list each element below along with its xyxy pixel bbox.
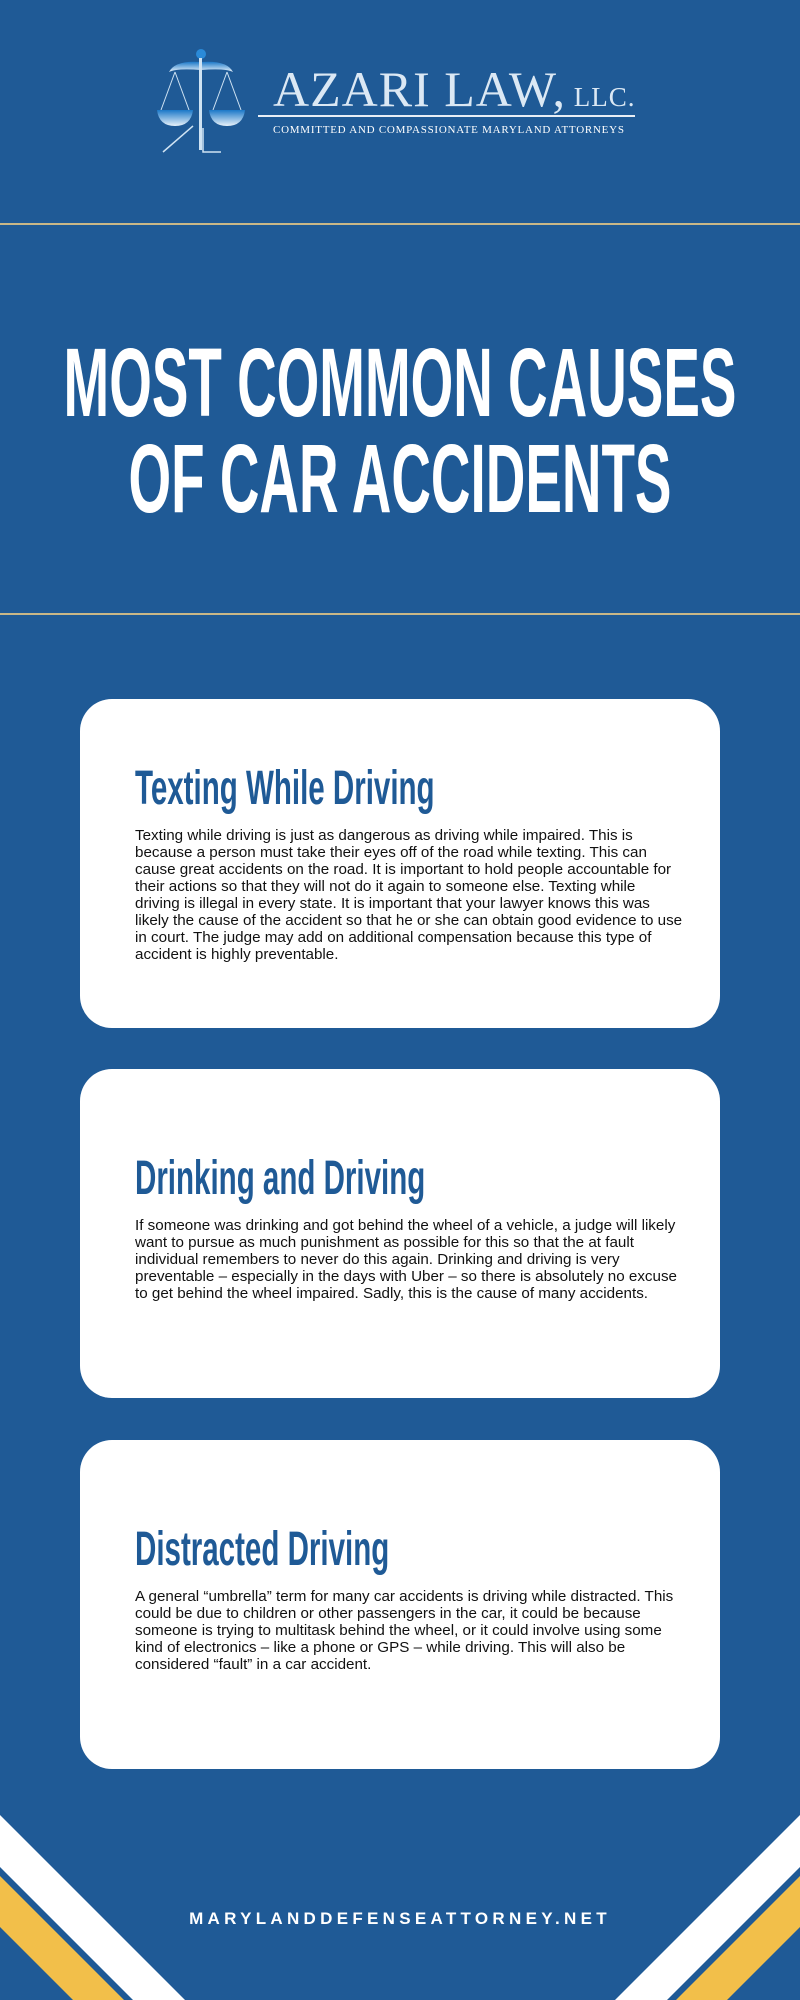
body text: someone is trying to multitask behind the wheel, or it could involve using some	[135, 1622, 662, 1639]
body text: kind of electronics – like a phone or GPS – while driving. This will also be	[135, 1639, 625, 1656]
title: MOST COMMON CAUSES	[64, 328, 736, 437]
body text: their actions so that they will not do it again to someone else. Texting while	[135, 878, 635, 895]
body text: Texting while driving is just as dangerous as driving while impaired. This is	[135, 827, 633, 844]
icon: scales of justice	[157, 49, 245, 153]
body text: in court. The judge may add on additional compensation because this type of	[135, 929, 651, 946]
body text	[135, 1217, 677, 1302]
body text: If someone was drinking and got behind the wheel of a vehicle, a judge will likely	[135, 1217, 675, 1234]
body text: likely the cause of the accident so that he or she can obtain good evidence to use	[135, 912, 682, 929]
body text: because a person must take their eyes off of the road while texting. This can	[135, 844, 647, 861]
title: OF CAR ACCIDENTS	[129, 424, 671, 533]
body text: accident is highly preventable.	[135, 946, 338, 963]
panel: distracted driving	[80, 1440, 720, 1769]
body text	[135, 827, 682, 963]
heading: Distracted Driving	[135, 1523, 389, 1576]
body text	[135, 1588, 673, 1673]
body text: preventable – especially in the days with Uber – so there is absolutely no excuse	[135, 1268, 677, 1285]
body text: could be due to children or other passengers in the car, it could be because	[135, 1605, 641, 1622]
tagline: COMMITTED AND COMPASSIONATE MARYLAND ATTORNEYS	[273, 124, 625, 136]
logo wordmark: AZARI LAW, LLC.	[273, 61, 636, 117]
decorative corner stripes	[0, 1815, 800, 2000]
body text: want to pursue as much punishment as possible for this so that the at fault	[135, 1234, 634, 1251]
panel: drinking and driving	[80, 1069, 720, 1398]
heading: Texting While Driving	[135, 762, 435, 815]
body text: individual remembers to never do this again. Drinking and driving is very	[135, 1251, 620, 1268]
footer url: MARYLANDDEFENSEATTORNEY.NET	[189, 1909, 611, 1928]
body text: considered “fault” in a car accident.	[135, 1656, 371, 1673]
body text: driving is illegal in every state. It is important that your lawyer knows this was	[135, 895, 650, 912]
logo	[157, 49, 636, 153]
body text: to get behind the wheel impaired. Sadly, this is the cause of many accidents.	[135, 1285, 648, 1302]
panel: texting while driving	[80, 699, 720, 1028]
title	[64, 328, 736, 533]
body text: A general “umbrella” term for many car accidents is driving while distracted. This	[135, 1588, 673, 1605]
heading: Drinking and Driving	[135, 1152, 425, 1205]
body text: cause great accidents on the road. It is important to hold people accountable for	[135, 861, 671, 878]
